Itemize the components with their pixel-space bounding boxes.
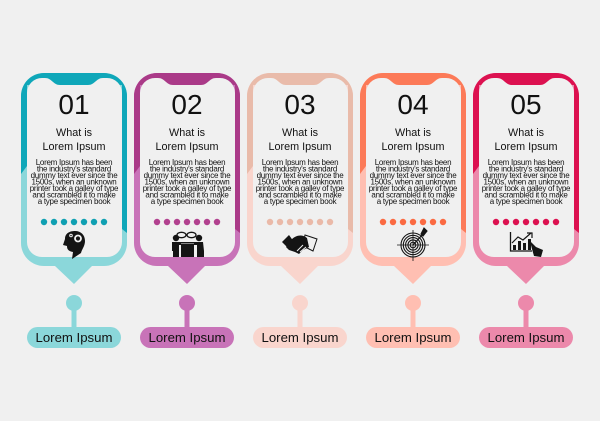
- card frame 01: [21, 70, 127, 284]
- card frame 03: [247, 70, 353, 284]
- connector 02: [179, 295, 195, 329]
- heading 03: What is: [282, 127, 319, 139]
- number 03: 03: [284, 89, 316, 120]
- label pill 01: [27, 327, 121, 348]
- label pill 02: [140, 327, 234, 348]
- label pill 01: Lorem Ipsum: [36, 330, 112, 345]
- body text 04: printer took a galley of type: [369, 184, 458, 193]
- dots 02: [154, 219, 220, 225]
- body text 03: 1500s, when an unknown: [257, 178, 343, 186]
- dots 05: [493, 219, 559, 225]
- label pill 03: Lorem Ipsum: [262, 330, 338, 345]
- number 05: 05: [510, 89, 542, 120]
- body text 04: the industry's standard: [376, 164, 450, 174]
- heading 05: What is: [508, 127, 545, 139]
- number 02: 02: [171, 89, 203, 120]
- body text 04: 1500s, when an unknown: [370, 178, 456, 186]
- dots 04: [380, 219, 446, 225]
- body text 02: Lorem Ipsum has been: [149, 158, 225, 167]
- heading 03: Lorem Ipsum: [268, 141, 332, 153]
- label pill 03: [253, 327, 347, 348]
- connector 03: [292, 295, 308, 329]
- card frame 05: [473, 70, 579, 284]
- body text 03: dummy text ever since the: [257, 171, 344, 180]
- body text 02: and scrambled it to make: [145, 190, 229, 200]
- label pill 04: [366, 327, 460, 348]
- body text 02: dummy text ever since the: [144, 171, 231, 180]
- body text 01: the industry's standard: [37, 164, 111, 174]
- heading 04: What is: [395, 127, 432, 139]
- card frame 04: [360, 70, 466, 284]
- icon: chart with hand: [510, 232, 543, 257]
- body text 01: dummy text ever since the: [31, 171, 118, 180]
- body text 05: dummy text ever since the: [483, 171, 570, 180]
- icon: handshake: [282, 235, 317, 254]
- body text 05: the industry's standard: [489, 164, 563, 174]
- body text 05: 1500s, when an unknown: [483, 178, 569, 186]
- body text 05: and scrambled it to make: [484, 190, 568, 200]
- body text 03: and scrambled it to make: [258, 190, 342, 200]
- body text 02: the industry's standard: [150, 164, 224, 174]
- heading 05: Lorem Ipsum: [494, 141, 558, 153]
- body text 01: 1500s, when an unknown: [31, 178, 117, 186]
- body text 02: a type specimen book: [151, 197, 225, 206]
- body text 05: Lorem Ipsum has been: [488, 158, 564, 167]
- panel: step 05: [473, 70, 579, 348]
- panel: step 02: [134, 70, 240, 348]
- body text 04: and scrambled it to make: [371, 190, 455, 200]
- heading 04: Lorem Ipsum: [381, 141, 445, 153]
- icon: meeting: [172, 232, 204, 257]
- body text 04: dummy text ever since the: [370, 171, 457, 180]
- body text 03: printer took a galley of type: [256, 184, 345, 193]
- body text 02: printer took a galley of type: [143, 184, 232, 193]
- icon: head with gears: [63, 231, 85, 259]
- label pill 04: Lorem Ipsum: [375, 330, 451, 345]
- body text 04: a type specimen book: [377, 197, 451, 206]
- number 04: 04: [397, 89, 429, 120]
- body text 03: a type specimen book: [264, 197, 338, 206]
- icon: target: [397, 228, 429, 261]
- card frame 02: [134, 70, 240, 284]
- body text 05: a type specimen book: [490, 197, 564, 206]
- body text 02: 1500s, when an unknown: [144, 178, 230, 186]
- panel: step 04: [360, 70, 466, 348]
- body text 04: Lorem Ipsum has been: [375, 158, 451, 167]
- heading 01: Lorem Ipsum: [42, 141, 106, 153]
- body text 01: and scrambled it to make: [32, 190, 116, 200]
- panel: step 01: [21, 70, 127, 348]
- dots 03: [267, 219, 333, 225]
- dots 01: [41, 219, 107, 225]
- number 01: 01: [58, 89, 90, 120]
- body text 03: the industry's standard: [263, 164, 337, 174]
- label pill 05: [479, 327, 573, 348]
- heading 02: What is: [169, 127, 206, 139]
- body text 03: Lorem Ipsum has been: [262, 158, 338, 167]
- connector 01: [66, 295, 82, 329]
- panel: step 03: [247, 70, 353, 348]
- label pill 05: Lorem Ipsum: [488, 330, 564, 345]
- body text 01: Lorem Ipsum has been: [36, 158, 112, 167]
- heading 01: What is: [56, 127, 93, 139]
- label pill 02: Lorem Ipsum: [149, 330, 225, 345]
- body text 01: a type specimen book: [38, 197, 112, 206]
- connector 04: [405, 295, 421, 329]
- connector 05: [518, 295, 534, 329]
- body text 05: printer took a galley of type: [482, 184, 571, 193]
- heading 02: Lorem Ipsum: [155, 141, 219, 153]
- body text 01: printer took a galley of type: [30, 184, 119, 193]
